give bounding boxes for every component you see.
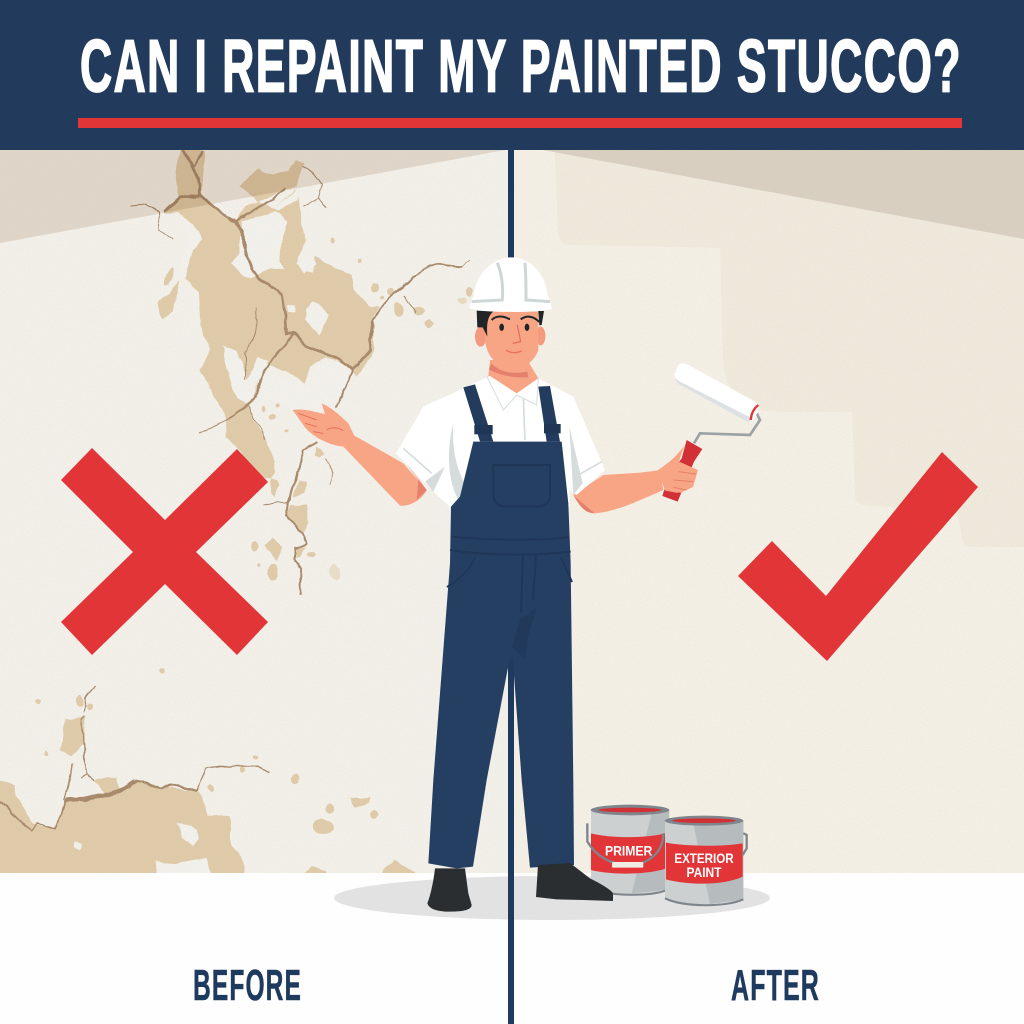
panel: after wall [511, 150, 1024, 874]
patches lower [0, 669, 417, 880]
can: exterior paint: PAINT [686, 865, 722, 880]
shirt [396, 376, 605, 507]
peeling plaster patches upper [157, 150, 473, 497]
left arm [293, 403, 427, 506]
icon: red check [738, 452, 978, 661]
mid wall patches and crack [253, 442, 340, 593]
peeling plaster and cracks [0, 150, 473, 880]
can: primer [587, 805, 669, 895]
cracks upper [130, 150, 470, 440]
paint roller [662, 363, 760, 502]
label: before: BEFORE [193, 961, 302, 1010]
floor shadow [334, 876, 770, 920]
title banner [0, 0, 1024, 150]
neck [488, 360, 538, 395]
worker [293, 257, 760, 912]
can: primer: PRIMER [605, 842, 652, 858]
trouser fold [512, 607, 537, 660]
gripping hand [658, 445, 698, 493]
can: exterior paint [665, 816, 747, 905]
title underline [78, 118, 962, 128]
roller handle [662, 440, 702, 502]
label: after: AFTER [731, 961, 820, 1010]
icon: red X [61, 448, 268, 655]
right boot [536, 863, 613, 901]
right arm [573, 470, 663, 513]
left boot [427, 868, 472, 912]
hard hat [469, 257, 552, 312]
head [475, 311, 545, 369]
open hand [293, 403, 354, 447]
wall texture [0, 150, 1024, 874]
left ceiling shadow [0, 150, 505, 243]
face [492, 317, 539, 322]
overalls [428, 384, 574, 868]
bib pocket [493, 465, 550, 507]
cracks lower [0, 685, 270, 832]
panel: before wall [0, 150, 511, 880]
can: exterior paint: EXTERIOR [674, 851, 734, 866]
center divider [508, 150, 514, 1024]
hair [477, 311, 544, 337]
floor [0, 873, 1024, 1024]
right ceiling shadow [543, 150, 1024, 239]
paint cans [587, 805, 747, 905]
white wall gaps within patch [177, 190, 350, 410]
